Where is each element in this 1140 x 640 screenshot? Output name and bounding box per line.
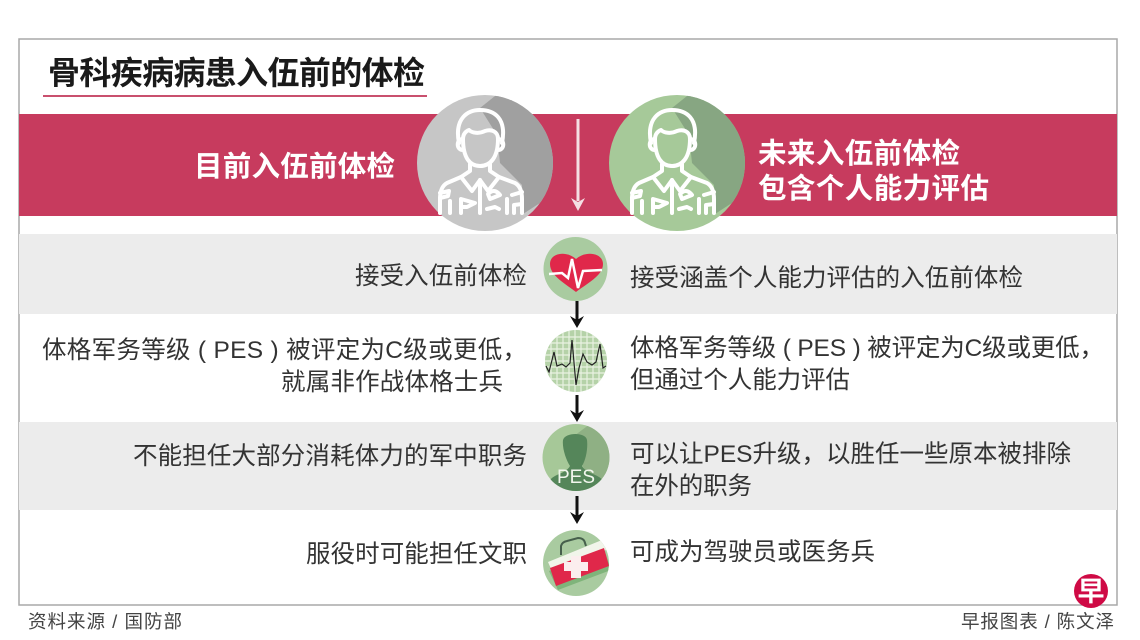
icon: soldier grey xyxy=(417,92,560,231)
logo: Zaobao: 早 xyxy=(1078,577,1104,607)
left text: step 2: 体格军务等级 ( PES ) 被评定为C级或更低， xyxy=(42,336,527,364)
header band xyxy=(19,114,1117,216)
right text: step 1: 接受涵盖个人能力评估的入伍前体检 xyxy=(630,264,1023,292)
icon: heart xyxy=(544,237,608,301)
arrow: step 3 to 4 xyxy=(570,496,584,524)
arrow: step 1 to 2 xyxy=(570,301,584,328)
right text: step 3 xyxy=(630,440,1071,500)
left text: step 3: 不能担任大部分消耗体力的军中职务 xyxy=(133,442,527,470)
left text: step 2 xyxy=(42,336,527,396)
right text: step 3: 可以让PES升级，以胜任一些原本被排除 xyxy=(630,440,1071,468)
heading: current check: 目前入伍前体检 xyxy=(194,151,395,183)
left text: step 4: 服役时可能担任文职 xyxy=(306,540,527,568)
right text: step 2: 但通过个人能力评估 xyxy=(630,366,850,394)
credit: 早报图表 / 陈文泽 xyxy=(961,611,1114,632)
left text: step 2: 就属非作战体格士兵 xyxy=(281,368,503,396)
row bands xyxy=(19,234,1117,510)
heading: future check: 未来入伍前体检 xyxy=(758,138,960,170)
source: 资料来源 / 国防部 xyxy=(28,611,182,632)
arrow: header centre xyxy=(571,119,585,211)
heading: future check: 包含个人能力评估 xyxy=(758,173,989,205)
icon: PES xyxy=(542,424,612,495)
icon: PES: PES xyxy=(557,467,595,488)
heading: future check xyxy=(758,138,989,205)
icon: soldier green xyxy=(609,92,752,231)
title: 骨科疾病病患入伍前的体检 xyxy=(48,55,425,91)
icon: medical kit xyxy=(543,530,611,596)
icon: ECG xyxy=(545,330,607,392)
arrow: step 2 to 3 xyxy=(570,395,584,422)
right text: step 2 xyxy=(630,334,1104,394)
left text: step 1: 接受入伍前体检 xyxy=(355,262,527,290)
right text: step 4: 可成为驾驶员或医务兵 xyxy=(630,538,875,566)
right text: step 3: 在外的职务 xyxy=(630,472,752,500)
right text: step 2: 体格军务等级 ( PES ) 被评定为C级或更低， xyxy=(630,334,1104,362)
